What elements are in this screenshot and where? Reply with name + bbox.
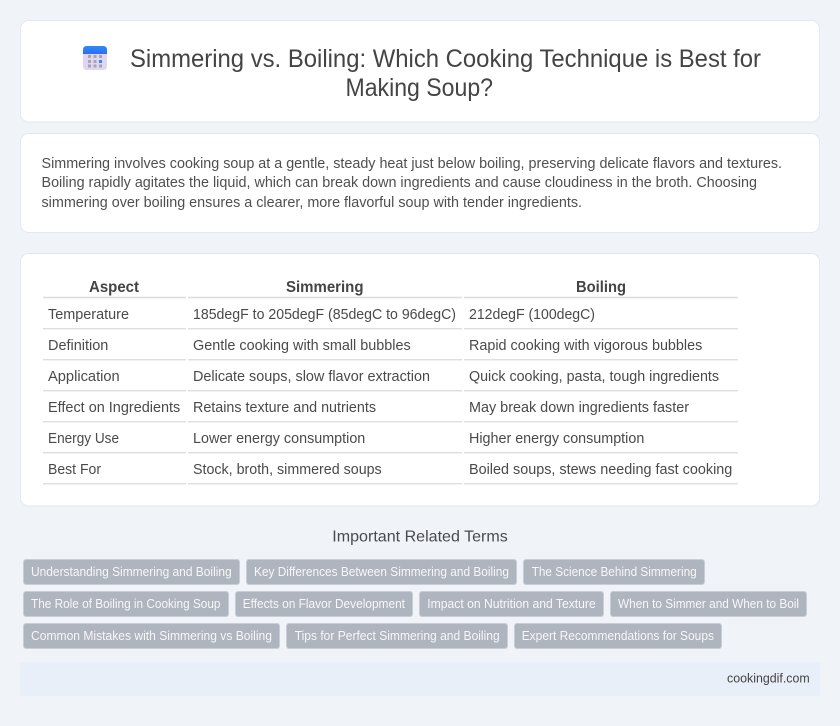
- text block: summary: [42, 156, 782, 211]
- table row: application: Quick cooking, pasta, tough ingredients: [469, 369, 719, 385]
- tag: [610, 592, 806, 616]
- tag: [24, 560, 240, 584]
- title: [130, 45, 761, 102]
- table row: effect on ingredients: Retains texture and nutrients: [193, 400, 376, 416]
- tag: Tips for Perfect Simmering and Boiling: [295, 629, 500, 643]
- table row: best for: Boiled soups, stews needing fast cooking: [469, 462, 732, 478]
- tag: [236, 592, 412, 616]
- tag: Impact on Nutrition and Texture: [427, 597, 596, 611]
- table row: temperature: 212degF (100degC): [469, 307, 595, 323]
- footer source text: cookingdif.com: [727, 671, 810, 686]
- tag: The Science Behind Simmering: [532, 565, 697, 579]
- table row: application: Application: [48, 369, 120, 385]
- table row: energy use: [48, 431, 644, 447]
- tag: Common Mistakes with Simmering vs Boiling: [31, 629, 272, 643]
- table row: energy use: Higher energy consumption: [469, 431, 644, 447]
- tag: [24, 592, 228, 616]
- related terms tags: [24, 560, 806, 648]
- tag: The Role of Boiling in Cooking Soup: [31, 597, 221, 611]
- title: Making Soup?: [346, 74, 493, 102]
- table row: best for: Best For: [48, 462, 101, 478]
- text block: summary: simmering over boiling ensures a clearer, more flavorful soup with tender ingredients.: [42, 195, 582, 211]
- table row: best for: Stock, broth, simmered soups: [193, 462, 382, 478]
- tag: Key Differences Between Simmering and Boiling: [254, 565, 509, 579]
- title: Simmering vs. Boiling: Which Cooking Technique is Best for: [130, 45, 761, 73]
- tag: When to Simmer and When to Boil: [618, 597, 799, 611]
- table row: energy use: Lower energy consumption: [193, 431, 365, 447]
- table row: energy use: Energy Use: [48, 431, 119, 447]
- table header row: Boiling: [576, 279, 626, 296]
- tag: [514, 624, 722, 648]
- table row: temperature: 185degF to 205degF (85degC to 96degC): [193, 307, 456, 323]
- tag: [286, 624, 508, 648]
- tag: Understanding Simmering and Boiling: [31, 565, 232, 579]
- text block: summary: Simmering involves cooking soup at a gentle, steady heat just below boiling, preserving delicate flavors and textures.: [42, 156, 782, 172]
- table row: application: Delicate soups, slow flavor extraction: [193, 369, 430, 385]
- footer: [20, 662, 820, 696]
- tag: [24, 624, 280, 648]
- table header row: Simmering: [286, 279, 364, 296]
- table row: definition: Gentle cooking with small bubbles: [193, 338, 411, 354]
- panel: comparison table: [20, 254, 820, 506]
- panel: summary paragraph: [20, 134, 820, 232]
- tag: Effects on Flavor Development: [243, 597, 405, 611]
- table row: definition: Rapid cooking with vigorous bubbles: [469, 338, 702, 354]
- table header row: [89, 279, 626, 296]
- table row: application: [48, 369, 719, 385]
- tag: [524, 560, 704, 584]
- table header row: Aspect: [89, 279, 140, 296]
- tag: [420, 592, 604, 616]
- icon: calendar: [83, 46, 107, 70]
- tag: Expert Recommendations for Soups: [522, 629, 714, 643]
- table row: definition: [48, 338, 702, 354]
- heading: related terms: Important Related Terms: [332, 529, 508, 546]
- table row: effect on ingredients: May break down ingredients faster: [469, 400, 689, 416]
- table row: temperature: [48, 307, 595, 323]
- table row: temperature: Temperature: [48, 307, 129, 323]
- panel: header: [20, 20, 820, 122]
- table row: effect on ingredients: Effect on Ingredients: [48, 400, 180, 416]
- tag: [246, 560, 516, 584]
- table row: effect on ingredients: [48, 400, 689, 416]
- text block: summary: Boiling rapidly agitates the liquid, which can break down ingredients and cause cloudiness in the broth. Choosing: [42, 175, 757, 191]
- table row: best for: [48, 462, 732, 478]
- table row: definition: Definition: [48, 338, 108, 354]
